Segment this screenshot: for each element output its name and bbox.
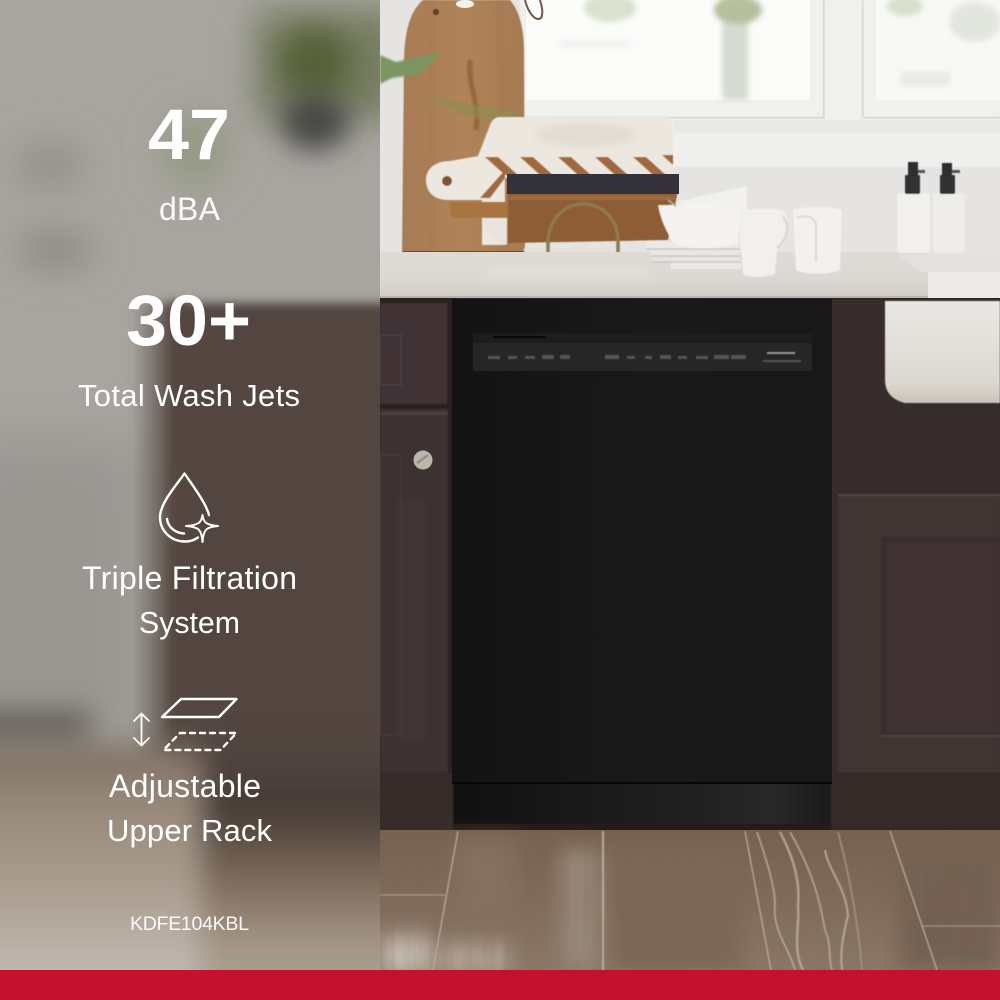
icon: water drop with sparkle [160,474,218,542]
upper drawer [380,303,447,404]
window frame [520,0,1000,167]
door knob [414,450,432,470]
blurred upper tones [14,10,405,268]
blurred side panel [0,0,380,970]
stat: 47 dBA [148,96,230,227]
label dBA: dBA [159,191,221,227]
toe base [832,773,1000,831]
right cabinet [832,299,1000,831]
lower door [380,409,448,773]
label system: System [139,605,240,640]
stat: 30+ jets [78,282,300,413]
cabinet backing [380,298,1000,832]
wood grain [383,934,508,970]
floor tone patches [380,840,1000,975]
feature: triple filtration [82,474,297,640]
grain streaks [757,832,862,970]
right window glass [876,0,1000,100]
lower wooden board [450,190,678,245]
white mug right [793,207,842,274]
feature: adjustable upper rack [107,699,272,848]
red footer bar [0,970,1000,1000]
kick plate [452,782,832,824]
icon: rack with height arrow [134,699,236,750]
marble cutting board [426,117,673,245]
farmhouse sink [885,301,1000,403]
greenery sprigs [380,52,522,120]
toe base [380,773,452,831]
door panel [838,494,1000,773]
dishwasher door [452,299,832,784]
dishwasher [452,299,832,831]
brass stand [524,204,618,258]
kitchen photo [380,0,1000,975]
control panel [473,334,812,371]
label total wash jets: Total Wash Jets [78,378,300,413]
large wooden board [402,0,542,254]
number 47: 47 [148,96,230,175]
number 30+: 30+ [126,282,251,361]
soap bottles [897,162,965,253]
model number: KDFE104KBL [130,913,249,935]
label upper rack: Upper Rack [107,813,272,848]
stack of plates [646,241,742,269]
black slate bar [507,174,679,194]
panel base tone [0,0,380,760]
label triple filtration: Triple Filtration [82,560,297,596]
label adjustable: Adjustable [109,768,261,804]
blurred floor tones [0,745,440,1000]
wood floor [380,830,1000,975]
plank seams [380,831,1000,970]
sink tray and counter beyond [899,255,928,272]
white mug left [738,209,787,277]
wall [380,0,1000,255]
left window glass [526,0,810,100]
countertop [380,252,928,298]
left cabinet [380,303,452,831]
blurred cabinet tones [0,303,430,773]
blurred baseboard band [0,712,90,738]
white bowls [658,186,747,248]
